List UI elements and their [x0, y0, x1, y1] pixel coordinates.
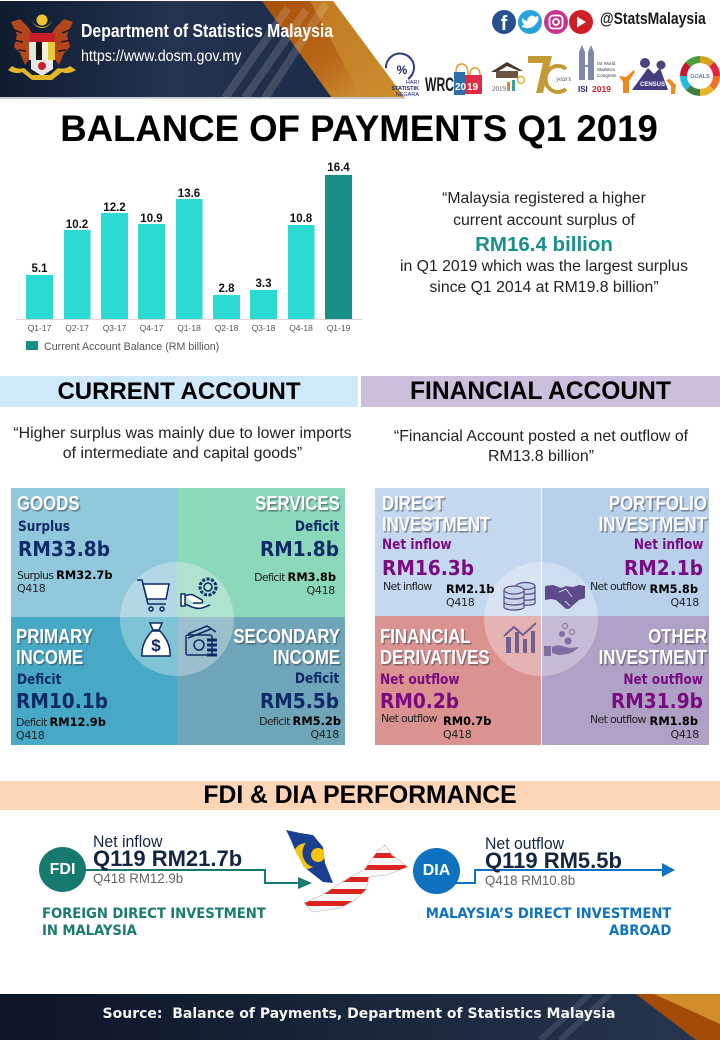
- icon: money bag: $: [151, 636, 161, 655]
- partner logos row: WRC: [425, 75, 454, 96]
- partner logos row: CENSUS: [640, 82, 665, 88]
- other investment block: RM1.8b: [650, 714, 698, 728]
- direct investment block: [382, 493, 494, 609]
- DIA caption: MALAYSIA’S DIRECT INVESTMENT: [426, 906, 671, 922]
- bar chart: current account balance: Q1-18: [177, 323, 201, 333]
- financial account note: RM13.8 billion”: [488, 448, 594, 465]
- partner logos row: %: [397, 63, 408, 77]
- main title: BALANCE OF PAYMENTS Q1 2019: [60, 108, 658, 149]
- FDI caption: [42, 906, 266, 939]
- icon: Malaysian coat of arms: [8, 14, 76, 80]
- bar chart: current account balance: 10.9: [140, 213, 163, 225]
- header banner: [0, 1, 405, 99]
- primary income block: Q418: [16, 729, 44, 742]
- FDI figures: Net inflow: [93, 832, 162, 851]
- icon: handshake: [545, 585, 585, 609]
- bar chart: current account balance: Q4-17: [140, 323, 164, 333]
- financial derivatives block: RM0.7b: [443, 714, 491, 728]
- primary income block: RM10.1b: [16, 689, 108, 713]
- primary income block: Deficit: [17, 672, 61, 688]
- bar chart: current account balance: Q1-19: [327, 323, 351, 333]
- secondary income block: RM5.5b: [260, 689, 339, 713]
- partner logos row: 20: [455, 82, 467, 93]
- bar chart: current account balance: 5.1: [32, 263, 48, 275]
- DIA caption: [426, 906, 672, 939]
- services block: Deficit: [295, 519, 339, 535]
- heading: financial account: [361, 376, 720, 407]
- goods block: RM33.8b: [18, 537, 110, 561]
- DIA caption: ABROAD: [609, 923, 671, 939]
- footer banner: [0, 994, 720, 1040]
- heading: FDI and DIA performance: [0, 781, 720, 810]
- bar chart: current account balance: Q2-17: [65, 323, 89, 333]
- current account note: “Higher surplus was mainly due to lower imports: [13, 425, 352, 442]
- partner logos row: ISI World: [597, 61, 616, 66]
- primary income block: INCOME: [16, 647, 83, 669]
- primary income block: PRIMARY: [16, 626, 93, 648]
- FDI caption: IN MALAYSIA: [42, 923, 137, 939]
- partner logos row: STATISTIK: [391, 86, 419, 92]
- FDI caption: FOREIGN DIRECT INVESTMENT: [42, 906, 266, 922]
- partner logos row: 2019: [592, 84, 611, 94]
- FDI badge circle: FDI: [50, 861, 75, 878]
- logo: sustainable development goals wheel: GOALS: [690, 74, 710, 80]
- FDI figures: Q418 RM12.9b: [93, 870, 183, 886]
- partner logos row: Congress: [597, 73, 617, 78]
- heading: FDI and DIA performance: FDI & DIA PERFORMANCE: [203, 782, 517, 809]
- secondary income block: Deficit: [295, 671, 339, 687]
- services block: Deficit RM3.8b: [254, 570, 336, 584]
- social media icons: [492, 10, 593, 35]
- financial derivatives block: Net outflow: [380, 672, 460, 688]
- DIA line arrow: [456, 863, 675, 884]
- heading: current account: [0, 376, 358, 407]
- goods block: Q418: [17, 582, 45, 595]
- secondary income block: [233, 626, 342, 741]
- logo: sustainable development goals wheel: [680, 56, 720, 96]
- portfolio investment block: RM5.8b: [650, 582, 698, 596]
- secondary income block: Deficit RM5.2b: [259, 714, 341, 728]
- callout: key quote: RM16.4 billion: [475, 233, 613, 256]
- financial derivatives block: [380, 626, 491, 741]
- social media handle: @StatsMalaysia: [600, 9, 706, 28]
- map of Malaysia with flag pattern: [286, 830, 409, 912]
- portfolio investment block: Net inflow: [633, 537, 703, 553]
- icon: coin stacks: [503, 582, 536, 611]
- other investment block: [590, 626, 708, 741]
- heading: current account: CURRENT ACCOUNT: [57, 378, 301, 405]
- icon: hand with gear: [180, 578, 218, 610]
- goods block: [17, 493, 112, 595]
- DIA badge circle: [413, 848, 460, 894]
- FDI arrow: [86, 869, 312, 889]
- icon: shopping cart: [137, 579, 170, 612]
- direct investment block: DIRECT: [382, 493, 445, 515]
- direct investment block: Net inflow: [383, 580, 432, 593]
- partner logos row: 19: [467, 82, 479, 93]
- callout: key quote: since Q1 2014 at RM19.8 billion”: [429, 279, 659, 296]
- secondary income block: SECONDARY: [233, 626, 340, 648]
- portfolio investment block: PORTFOLIO: [609, 493, 707, 515]
- partner logos row: HARI: [406, 80, 419, 86]
- bar chart: current account balance: 10.2: [66, 219, 88, 231]
- DIA badge circle: DIA: [423, 862, 450, 879]
- secondary income block: INCOME: [273, 647, 340, 669]
- bar chart: current account balance: Q1-17: [28, 323, 52, 333]
- portfolio investment block: [590, 493, 708, 609]
- direct investment block: RM16.3b: [382, 556, 474, 580]
- icon: money bag: [141, 622, 171, 657]
- goods block: Surplus: [18, 519, 70, 535]
- panel: current account quadrants: [11, 488, 345, 745]
- current account note: [13, 425, 352, 462]
- DIA figures: Q119 RM5.5b: [485, 848, 622, 873]
- bar chart: current account balance: 16.4: [327, 162, 350, 174]
- callout: key quote: in Q1 2019 which was the largest surplus: [400, 258, 688, 275]
- other investment block: OTHER: [648, 626, 707, 648]
- other investment block: INVESTMENT: [599, 647, 707, 669]
- goods block: Surplus RM32.7b: [17, 568, 112, 582]
- callout: key quote: [400, 190, 688, 296]
- FDI badge circle: [39, 847, 86, 892]
- bar chart: current account balance: 12.2: [103, 202, 126, 214]
- DIA figures: Net outflow: [485, 834, 564, 853]
- direct investment block: INVESTMENT: [382, 514, 490, 536]
- bar chart: current account balance: Q3-17: [103, 323, 127, 333]
- primary income block: [16, 626, 108, 742]
- financial derivatives block: Net outflow: [381, 712, 437, 725]
- partner logos row: Statistics: [597, 67, 616, 72]
- goods block: GOODS: [17, 493, 80, 515]
- financial account note: [394, 428, 688, 465]
- other investment block: Q418: [671, 728, 699, 741]
- bar chart: current account balance: [16, 162, 362, 353]
- services block: Q418: [307, 584, 335, 597]
- bar chart: current account balance: 13.6: [178, 188, 200, 200]
- bar chart: current account balance: Q2-18: [215, 323, 239, 333]
- icon: hand receiving coins: [544, 623, 579, 656]
- DIA figures: [485, 834, 622, 888]
- bar chart: current account balance: Q3-18: [252, 323, 276, 333]
- FDI figures: Q119 RM21.7b: [93, 846, 242, 871]
- financial account note: “Financial Account posted a net outflow of: [394, 428, 688, 445]
- heading: financial account: FINANCIAL ACCOUNT: [410, 378, 671, 405]
- partner logos row: NEGARA: [396, 92, 419, 98]
- partner logos row: [385, 45, 676, 98]
- callout: key quote: current account surplus of: [453, 212, 635, 229]
- bar chart: current account balance: 3.3: [256, 278, 272, 290]
- other investment block: Net outflow: [623, 672, 703, 688]
- services block: SERVICES: [255, 493, 340, 515]
- panel: financial account quadrants: [375, 488, 709, 745]
- financial derivatives block: FINANCIAL: [380, 626, 471, 648]
- financial derivatives block: RM0.2b: [380, 689, 459, 713]
- direct investment block: Net inflow: [382, 537, 452, 553]
- text: Q418: [671, 596, 699, 609]
- other investment block: RM31.9b: [611, 689, 703, 713]
- bar chart: current account balance: Q4-18: [289, 323, 313, 333]
- financial derivatives block: Q418: [443, 728, 471, 741]
- current account note: of intermediate and capital goods”: [63, 445, 302, 462]
- callout: key quote: “Malaysia registered a higher: [442, 190, 646, 207]
- portfolio investment block: Net outflow: [590, 580, 646, 593]
- header title: Department of Statistics Malaysia: [81, 21, 333, 41]
- FDI figures: [93, 832, 242, 886]
- bar chart: current account balance: Current Account Balance (RM billion): [44, 341, 219, 353]
- direct investment block: RM2.1b: [446, 582, 494, 596]
- social media icons: f: [501, 13, 508, 35]
- source line: Source: Balance of Payments, Department of Statistics Malaysia: [103, 1006, 615, 1022]
- partner logos row: ISI: [578, 85, 588, 94]
- partner logos row: 2019: [492, 85, 506, 93]
- portfolio investment block: RM2.1b: [624, 556, 703, 580]
- DIA figures: Q418 RM10.8b: [485, 872, 575, 888]
- text: Q418: [446, 596, 474, 609]
- services block: RM1.8b: [260, 537, 339, 561]
- icon: rising bar chart: [503, 622, 537, 653]
- bar chart: current account balance: 10.8: [290, 213, 313, 225]
- partner logos row: years: [555, 75, 571, 83]
- icon: banknotes and coins: [185, 625, 217, 656]
- portfolio investment block: INVESTMENT: [599, 514, 707, 536]
- header url: https://www.dosm.gov.my: [81, 48, 241, 65]
- secondary income block: Q418: [311, 728, 339, 741]
- bar chart: current account balance: 2.8: [218, 283, 235, 295]
- primary income block: Deficit RM12.9b: [16, 715, 106, 729]
- services block: [254, 493, 341, 597]
- financial derivatives block: DERIVATIVES: [380, 647, 490, 669]
- other investment block: Net outflow: [590, 713, 646, 726]
